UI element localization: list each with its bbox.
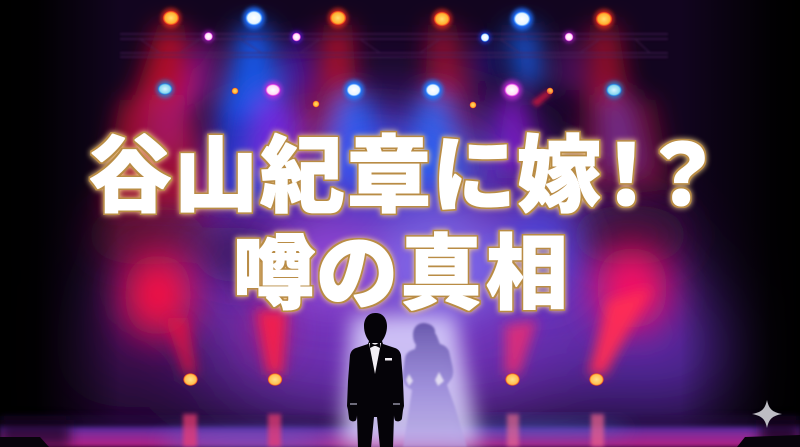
blue column and pink glow in mid stage [270, 115, 580, 320]
stage floor [0, 414, 800, 447]
title line 2: 噂の真相 [233, 229, 568, 320]
floor reflections [183, 414, 604, 447]
lights: top row [161, 7, 614, 44]
cuffs [350, 403, 400, 405]
title line 1: 谷山紀章に嫁！？ [88, 129, 724, 223]
lights: second row [156, 80, 623, 108]
truss [120, 34, 668, 57]
pocket square [385, 358, 392, 360]
red and blue beams [100, 25, 670, 210]
lower red light beams [124, 246, 668, 375]
groom silhouette [347, 313, 404, 447]
icon: sparkle watermark [752, 400, 782, 428]
stage corners [0, 437, 49, 447]
purple haze [50, 100, 760, 425]
shirt and bow tie [369, 343, 381, 374]
spotlight glow behind couple [340, 315, 480, 447]
dark maroon patches [85, 205, 690, 283]
bride silhouette [403, 323, 467, 447]
floor lights [183, 373, 604, 386]
side darkening [0, 0, 120, 447]
